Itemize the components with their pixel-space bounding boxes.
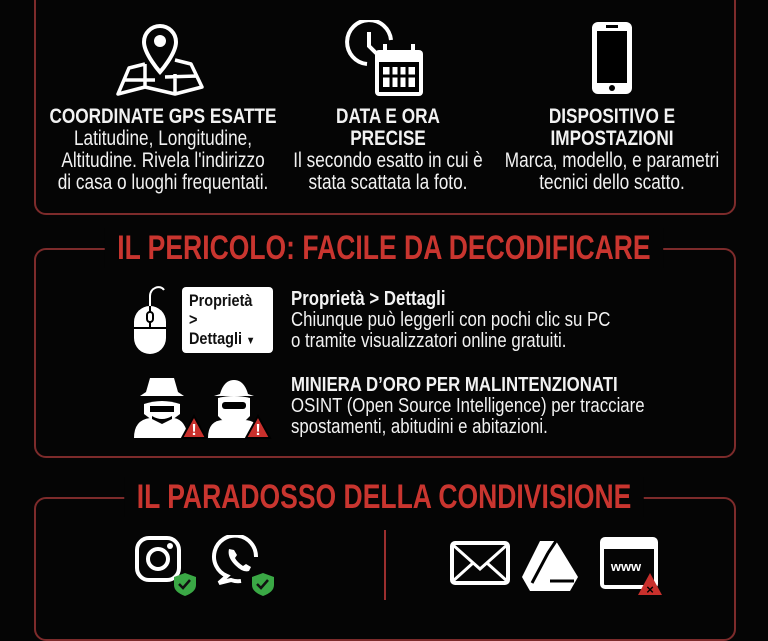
text: device <box>505 105 719 194</box>
text: device: DISPOSITIVO E <box>549 105 675 128</box>
callout: properties box: Proprietà <box>189 291 252 310</box>
icon: instagram whatsapp safe <box>135 535 274 596</box>
text: properties: Chiunque può leggerli con pochi clic su PC <box>291 309 610 331</box>
text: date: Il secondo esatto in cui è <box>293 149 483 172</box>
text: GPS <box>49 105 277 194</box>
icon: mail drive web unsafe: www <box>610 559 642 574</box>
icon: mail drive web unsafe: × <box>646 582 654 597</box>
text: GPS: Latitudine, Longitudine, <box>74 127 252 150</box>
text: gold mine: OSINT (Open Source Intelligence) per tracciare <box>291 395 645 417</box>
text: device: tecnici dello scatto. <box>539 171 685 194</box>
text: date: DATA E ORA <box>336 105 440 128</box>
text: gold mine <box>291 374 645 438</box>
text: GPS: COORDINATE GPS ESATTE <box>49 105 277 128</box>
text: properties <box>291 288 610 352</box>
icon: phone <box>592 22 632 94</box>
text: properties: o tramite visualizzatori online gratuiti. <box>291 330 566 352</box>
text: GPS: di casa o luoghi frequentati. <box>58 171 268 194</box>
icon: spies <box>134 378 268 439</box>
icon: map pin <box>116 24 204 96</box>
icon: spies: ! <box>191 422 197 439</box>
callout: properties box <box>182 287 273 353</box>
divider <box>384 530 386 600</box>
text: date: stata scattata la foto. <box>309 171 467 194</box>
text: device: Marca, modello, e parametri <box>505 149 719 172</box>
text: GPS: Altitudine. Rivela l'indirizzo <box>61 149 265 172</box>
icon: clock calendar <box>345 20 423 96</box>
text: properties: Proprietà > Dettagli <box>291 288 446 310</box>
panel: metadata <box>34 0 736 215</box>
panel: danger <box>34 248 736 458</box>
text: date <box>293 105 483 194</box>
text: date: PRECISE <box>350 127 426 150</box>
callout: properties box: Dettagli ▼ <box>189 329 255 348</box>
callout: properties box: > <box>189 310 197 329</box>
text: gold mine: spostamenti, abitudini e abitazioni. <box>291 416 548 438</box>
text: gold mine: MINIERA D’ORO PER MALINTENZIONATI <box>291 374 618 396</box>
heading: danger: IL PERICOLO: FACILE DA DECODIFICARE <box>117 229 651 267</box>
icon: mouse <box>134 286 166 354</box>
panel: paradox <box>34 497 736 641</box>
icon: mail drive web unsafe <box>450 537 662 597</box>
icon: spies: ! <box>255 422 261 439</box>
text: device: IMPOSTAZIONI <box>550 127 674 150</box>
heading: paradox: IL PARADOSSO DELLA CONDIVISIONE <box>137 478 631 516</box>
